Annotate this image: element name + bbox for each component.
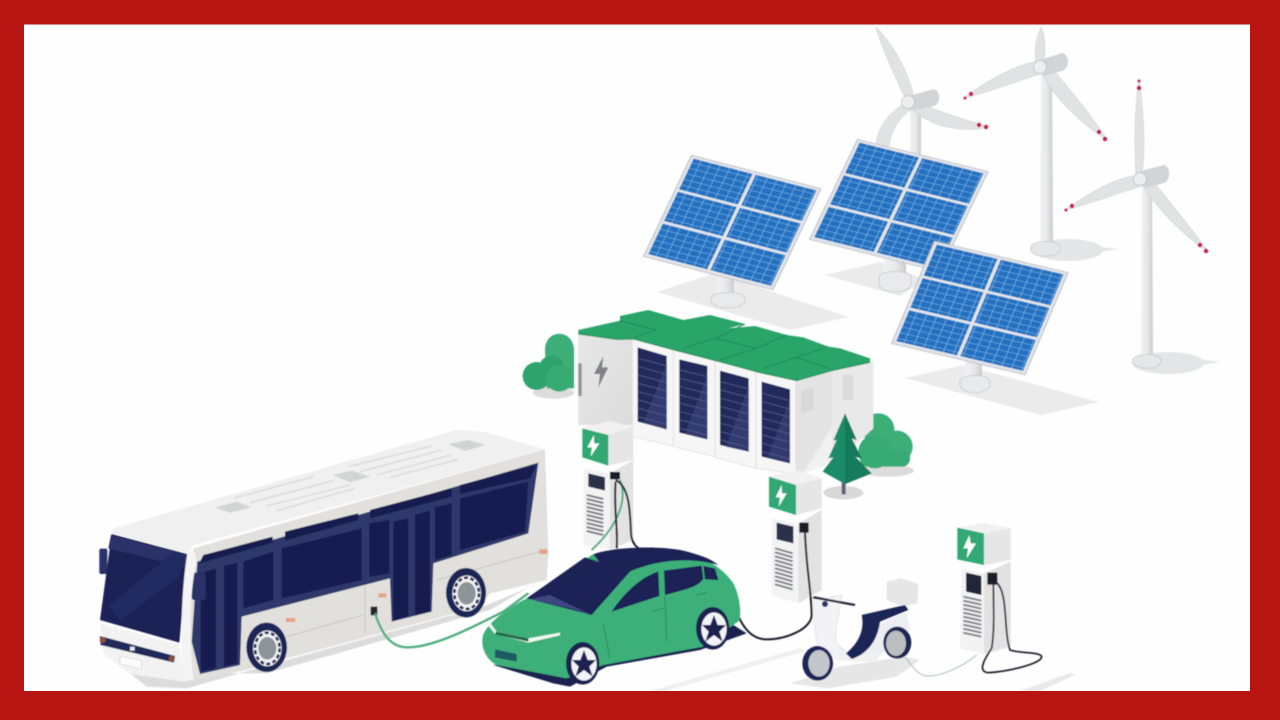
front lights band (100, 636, 175, 663)
side body (185, 449, 548, 682)
red tips (1064, 80, 1208, 253)
cabinet 4 (756, 372, 796, 474)
blades (1065, 78, 1208, 252)
green lid (578, 310, 870, 381)
solar panel 1 post (711, 276, 745, 308)
black cables (615, 480, 812, 639)
door lines (603, 593, 707, 658)
lightning icon (594, 356, 608, 387)
right bush (858, 413, 914, 477)
socket (799, 523, 809, 533)
front bumper (100, 623, 184, 682)
floor (837, 643, 880, 662)
bus shadow (130, 580, 547, 688)
scooter (802, 578, 918, 681)
handlebar (813, 597, 855, 605)
tower (910, 108, 921, 158)
roof ribs (233, 446, 458, 511)
blades (876, 27, 990, 146)
vents (963, 597, 981, 637)
tower base (1031, 242, 1060, 256)
headlamp (822, 601, 828, 607)
license plate (120, 656, 142, 669)
tower (1141, 184, 1153, 354)
blades (964, 27, 1107, 140)
red tips (964, 92, 1107, 141)
rear wheel (696, 607, 729, 650)
front bus wheel (246, 623, 287, 672)
seat (846, 605, 908, 659)
charger 2 (769, 470, 822, 603)
nacelle (903, 89, 939, 111)
tower (1040, 72, 1053, 243)
cabinet 2 (673, 349, 715, 457)
solar panel 2 post (879, 258, 911, 292)
rear bus wheel (446, 568, 486, 617)
charger 1 (582, 421, 633, 550)
solar panel 3 post (960, 360, 990, 393)
side windows (612, 566, 703, 612)
scooter grey cable (905, 655, 977, 676)
rear body (857, 612, 910, 657)
battery, chargers, car group (482, 310, 914, 687)
pine tree (823, 413, 872, 499)
car shadow (493, 625, 747, 687)
headlights and grille (487, 622, 560, 643)
vents (587, 495, 603, 535)
charger 3 (957, 523, 1011, 654)
battery storage (578, 310, 873, 474)
green bus cable (375, 593, 528, 647)
side vent (843, 375, 853, 400)
head (769, 470, 822, 485)
tower base (1133, 354, 1161, 368)
charger 3 and scooter (790, 523, 1042, 688)
socket (987, 573, 997, 585)
ground shadows (650, 239, 1220, 691)
screen (777, 523, 793, 543)
nacelle (1139, 165, 1169, 188)
scooter shadow (790, 657, 920, 688)
window panes (199, 465, 537, 672)
cabinet 3 (715, 360, 756, 468)
head (582, 421, 633, 435)
left bush (523, 334, 574, 399)
front scooter wheel (802, 646, 833, 681)
charger 3 black cable (982, 583, 1042, 673)
bolt icon (587, 435, 599, 457)
socket (610, 472, 620, 479)
window louvers (638, 358, 790, 459)
nacelle (1037, 53, 1068, 76)
solar panel 3 (892, 241, 1068, 375)
red tips (977, 123, 988, 129)
wind turbine 3 (1064, 78, 1208, 368)
bolt icon (776, 485, 787, 507)
solar panel 1 (644, 155, 821, 290)
wind turbine 2 (964, 27, 1107, 256)
solar panel 2 (810, 139, 988, 272)
roof (112, 430, 545, 553)
front wheel (566, 642, 599, 685)
windshield (527, 557, 630, 615)
car (482, 547, 747, 687)
cabinet 1 (632, 338, 673, 446)
wind turbine 1 (876, 27, 990, 158)
body trim (287, 552, 540, 637)
front side pillar (181, 550, 197, 682)
right side block (832, 361, 873, 467)
left block with bolt (578, 332, 633, 425)
window band (192, 463, 538, 674)
screen (588, 473, 605, 491)
charge port (371, 607, 377, 615)
vents (775, 548, 793, 589)
rear box (887, 578, 918, 607)
roof vents (215, 440, 485, 513)
roof (593, 547, 718, 580)
license plate (495, 649, 517, 662)
windshield (100, 534, 187, 643)
side face (795, 369, 832, 474)
lid seams (578, 321, 870, 381)
head (957, 523, 1011, 533)
bus (99, 430, 548, 688)
body (482, 550, 740, 678)
front shield (813, 595, 848, 660)
orange markers (286, 549, 547, 622)
screen (966, 573, 981, 595)
green bus cable at charger (592, 480, 623, 550)
mirrors (99, 549, 206, 600)
rear scooter wheel (883, 627, 911, 659)
bolt icon (963, 535, 976, 558)
